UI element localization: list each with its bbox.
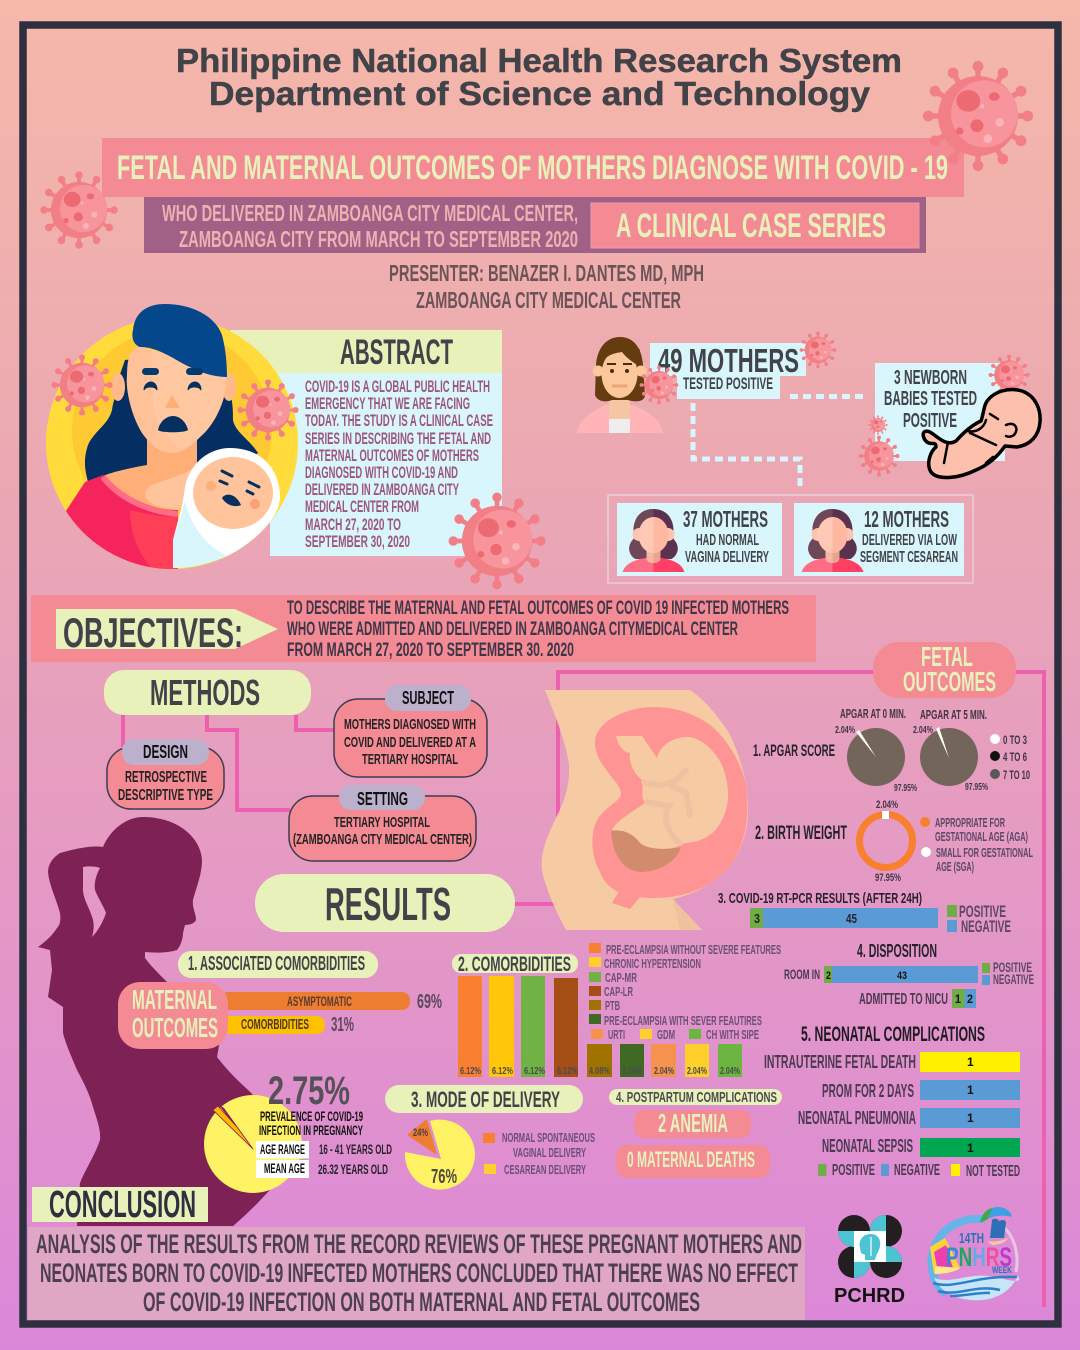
bar chart: comorbidities: 2.04%: [622, 1065, 642, 1077]
comorbidities legend: PRE-ECLAMPSIA WITH SEVER FEAUTIRES: [604, 1013, 762, 1028]
mode of delivery heading: [385, 1085, 583, 1113]
panel: disposition: [784, 941, 1034, 1008]
fetal outcomes heading: [873, 641, 1016, 698]
birth weight legend: [920, 815, 1033, 874]
logo: 14th PNHRS week: PNHRS: [946, 1242, 1012, 1272]
birth weight legend: AGE (SGA): [936, 859, 974, 874]
mean age: MEAN AGE: [264, 1160, 305, 1176]
card: setting: (ZAMBOANGA CITY MEDICAL CENTER): [293, 831, 472, 848]
bar chart: comorbidities: 6.12%: [460, 1065, 481, 1077]
rt-pcr bar: 45: [846, 911, 857, 926]
icon: virus at newborn bottom: [859, 436, 899, 476]
mode of delivery legend: NORMAL SPONTANEOUS: [502, 1130, 595, 1145]
pie: apgar 5 min: 2.04%: [913, 724, 933, 736]
prevalence pie: [204, 1095, 302, 1193]
newborn box: POSITIVE: [903, 410, 957, 432]
comorbidities legend: CH WITH SIPE: [706, 1027, 759, 1042]
nicu bar: 1: [955, 992, 961, 1006]
prevalence stats: INFECTION IN PREGNANCY: [259, 1122, 363, 1138]
presenter: ZAMBOANGA CITY MEDICAL CENTER: [416, 287, 681, 313]
fetal outcomes heading: OUTCOMES: [903, 666, 996, 697]
neonatal legend: [818, 1162, 1020, 1180]
clinical case series tag: A CLINICAL CASE SERIES: [616, 207, 886, 245]
panel: rt-pcr results: [718, 890, 1011, 936]
49 mothers box: TESTED POSITIVE: [683, 374, 773, 393]
objectives text: WHO WERE ADMITTED AND DELIVERED IN ZAMBOANGA CITYMEDICAL CENTER: [287, 619, 738, 640]
clinical case series tag: [591, 203, 919, 248]
panel: postpartum complications: 4. POSTPARTUM COMPLICATIONS: [616, 1089, 777, 1106]
conclusion heading: [32, 1184, 208, 1226]
prevalence stats: [256, 1069, 392, 1178]
objectives text: [287, 598, 789, 661]
abstract text: MATERNAL OUTCOMES OF MOTHERS: [305, 447, 479, 465]
room in bar: 2: [826, 970, 831, 982]
results heading: [255, 874, 515, 932]
objectives arrow tag: [56, 609, 278, 649]
abstract text: MARCH 27, 2020 TO: [305, 516, 401, 534]
icon: fetus: [923, 390, 1040, 478]
maternal deaths tag: [616, 1145, 770, 1178]
comorbidities legend: CAP-MR: [605, 970, 637, 985]
associated comorbidities bars: [220, 991, 442, 1036]
arrow: fetal outcomes bracket line: [515, 672, 1044, 1307]
icon: virus small: [868, 415, 888, 435]
subtitle banner: [144, 197, 926, 253]
asymptomatic bar: ASYMPTOMATIC: [287, 994, 352, 1009]
panel: neonatal complications: [764, 1023, 1020, 1180]
neonatal pneumonia: NEONATAL PNEUMONIA: [798, 1108, 916, 1128]
comorbidities legend: [589, 942, 781, 1042]
card: design: [107, 739, 224, 809]
comorbidities legend: URTI: [608, 1027, 625, 1042]
panel: patient flow: [577, 332, 1040, 583]
card: subject: SUBJECT: [402, 688, 454, 708]
bar chart: comorbidities: 2.04%: [720, 1065, 740, 1077]
illustration: pregnant uterus: [542, 690, 748, 930]
arrow: dashed connector to newborn: [790, 394, 864, 399]
card: 12 mothers: DELIVERED VIA LOW: [862, 532, 958, 549]
card: design: DESCRIPTIVE TYPE: [118, 787, 213, 804]
49 mothers box: [650, 342, 806, 399]
apgar legend: 0 TO 3: [1003, 733, 1027, 747]
card: setting: SETTING: [357, 789, 408, 809]
panel: birth weight: [755, 799, 1033, 884]
pie: apgar 0 min: 2.04%: [835, 724, 855, 736]
panel: postpartum complications: [609, 1089, 782, 1178]
card: 37 mothers: [617, 503, 782, 576]
maternal deaths tag: 0 MATERNAL DEATHS: [627, 1147, 755, 1172]
49 mothers box: 49 MOTHERS: [658, 342, 799, 379]
mode of delivery pie: [405, 1119, 475, 1190]
card: subject: COVID AND DELIVERED AT A: [344, 734, 476, 751]
title banner: [102, 138, 964, 197]
icon: virus at 49 mothers right: [800, 332, 836, 368]
maternal outcomes heading: MATERNAL: [132, 984, 217, 1015]
newborn box: [875, 363, 1005, 461]
card: setting: [289, 785, 476, 861]
bar chart: comorbidities: 2.04%: [654, 1065, 674, 1077]
abstract text: MEDICAL CENTER FROM: [305, 498, 419, 516]
disposition legend: [982, 959, 1034, 987]
results heading: RESULTS: [325, 878, 451, 930]
methods heading: [104, 670, 311, 715]
logo: PCHRD: [834, 1215, 905, 1307]
maternal outcomes heading: [118, 982, 228, 1049]
objectives text: FROM MARCH 27, 2020 TO SEPTEMBER 30. 2020: [287, 640, 574, 661]
panel: rt-pcr results: 3. COVID-19 RT-PCR RESULTS (AFTER 24H): [718, 890, 922, 907]
age range: AGE RANGE: [260, 1141, 305, 1157]
associated comorbidities heading: 1. ASSOCIATED COMORBIDITIES: [188, 953, 365, 975]
icon: virus at 49 mothers left: [640, 366, 678, 404]
donut chart: 2.04%: [876, 799, 898, 811]
logo: PCHRD: PCHRD: [834, 1285, 905, 1307]
disposition legend: NEGATIVE: [993, 971, 1034, 987]
card: 37 mothers: VAGINA DELIVERY: [685, 549, 769, 566]
birth weight legend: APPROPRIATE FOR: [935, 815, 1005, 830]
panel: apgar score: 1. APGAR SCORE: [753, 741, 835, 760]
card: subject: TERTIARY HOSPITAL: [362, 751, 458, 768]
icon: virus near mother left: [51, 354, 113, 416]
panel: apgar score: APGAR AT 0 MIN.: [840, 706, 906, 721]
card: 12 mothers: 12 MOTHERS: [864, 506, 949, 532]
methods connectors: [123, 715, 335, 810]
mode of delivery legend: VAGINAL DELIVERY: [513, 1145, 586, 1160]
comorbidities legend: CAP-LR: [604, 984, 633, 999]
bar chart: comorbidities: 4.08%: [589, 1065, 610, 1077]
apgar legend: 4 TO 6: [1003, 750, 1027, 764]
donut chart: [860, 799, 912, 884]
abstract text: TODAY. THE STUDY IS A CLINICAL CASE: [305, 412, 493, 430]
associated comorbidities heading: [178, 951, 378, 978]
anemia tag: 2 ANEMIA: [658, 1108, 728, 1138]
prevalence stats: 2.75%: [268, 1069, 350, 1113]
asymptomatic bar: [220, 991, 442, 1013]
age range: 16 - 41 YEARS OLD: [319, 1141, 392, 1157]
comorbidities heading: [452, 953, 578, 976]
abstract text: [305, 378, 493, 551]
icon: mother and baby illustration: [46, 304, 298, 575]
prom for 2 days: PROM FOR 2 DAYS: [822, 1081, 914, 1101]
mode of delivery pie: 24%: [413, 1127, 428, 1139]
panel: birth weight: 2. BIRTH WEIGHT: [755, 823, 847, 844]
age range: [256, 1141, 392, 1158]
methods heading: METHODS: [150, 672, 260, 713]
logo: 14th PNHRS week: WEEK: [992, 1265, 1012, 1275]
arrow: dashed connector to deliveries: [693, 403, 800, 490]
room in bar: [784, 966, 978, 983]
neonatal sepsis: 1: [967, 1141, 974, 1155]
subtitle banner: ZAMBOANGA CITY FROM MARCH TO SEPTEMBER 2020: [179, 226, 578, 252]
icon: virus at newborn top: [989, 355, 1029, 395]
nicu bar: ADMITTED TO NICU: [859, 991, 948, 1008]
rt-pcr bar: 3: [754, 911, 760, 926]
newborn box: 3 NEWBORN: [894, 367, 967, 389]
conclusion heading: CONCLUSION: [49, 1184, 196, 1226]
card: design: RETROSPECTIVE: [125, 769, 207, 786]
abstract text: DIAGNOSED WITH COVID-19 AND: [305, 464, 458, 482]
icon: virus top right: [923, 61, 1033, 171]
pie: apgar 5 min: [913, 724, 988, 793]
mode of delivery heading: 3. MODE OF DELIVERY: [411, 1087, 560, 1112]
maternal outcomes heading: OUTCOMES: [132, 1012, 218, 1043]
panel: objectives: [31, 595, 816, 662]
comorbidities legend: PTB: [605, 998, 620, 1013]
mode of delivery pie: 76%: [431, 1166, 457, 1188]
panel: disposition: 4. DISPOSITION: [857, 941, 937, 961]
header title: Department of Science and Technology: [209, 75, 871, 112]
panel: apgar score: APGAR AT 5 MIN.: [920, 707, 987, 722]
deliveries frame: [608, 495, 973, 583]
pie: apgar 5 min: 97.95%: [965, 781, 988, 793]
conclusion text: OF COVID-19 INFECTION ON BOTH MATERNAL AND FETAL OUTCOMES: [143, 1287, 700, 1317]
neonatal legend: NOT TESTED: [966, 1163, 1020, 1180]
fetal outcomes heading: FETAL: [921, 641, 973, 672]
card: 12 mothers: [794, 503, 964, 576]
card: subject: [334, 685, 487, 777]
bar chart: comorbidities: 2.04%: [687, 1065, 707, 1077]
neonatal pneumonia: 1: [967, 1111, 974, 1125]
bar chart: comorbidities: 6.12%: [557, 1065, 578, 1077]
card: design: DESIGN: [143, 742, 188, 762]
card: 37 mothers: 37 MOTHERS: [683, 506, 768, 532]
neonatal legend: NEGATIVE: [894, 1162, 940, 1179]
comorbidities legend: GDM: [657, 1027, 675, 1042]
panel: objectives: OBJECTIVES:: [63, 609, 243, 656]
rt-pcr bar: [750, 908, 938, 928]
newborn box: BABIES TESTED: [884, 388, 977, 410]
logo: 14th PNHRS week: [930, 1207, 1019, 1300]
abstract text: EMERGENCY THAT WE ARE FACING: [305, 395, 470, 413]
icon: virus near mother right: [237, 379, 299, 441]
rt-pcr legend: NEGATIVE: [961, 917, 1011, 936]
neonatal sepsis: NEONATAL SEPSIS: [822, 1136, 913, 1156]
abstract text: SERIES IN DESCRIBING THE FETAL AND: [305, 430, 491, 448]
prom for 2 days: 1: [967, 1083, 974, 1097]
intrauterine fetal death: 1: [967, 1055, 974, 1069]
presenter: [389, 260, 704, 313]
panel: abstract: [230, 330, 502, 556]
comorbidities legend: CHRONIC HYPERTENSION: [604, 956, 701, 971]
abstract heading: ABSTRACT: [340, 333, 453, 372]
mean age: [256, 1160, 388, 1178]
conclusion text: [28, 1227, 805, 1320]
bar chart: comorbidities: 6.12%: [492, 1065, 513, 1077]
header title: Philippine National Health Research System: [176, 42, 902, 79]
card: 12 mothers: SEGMENT CESAREAN: [860, 549, 958, 566]
panel: apgar score: [753, 706, 1030, 794]
silhouette: pregnant woman: [38, 817, 287, 1226]
mean age: 26.32 YEARS OLD: [318, 1161, 388, 1177]
mode of delivery legend: CESAREAN DELIVERY: [504, 1162, 586, 1177]
logo: 14th PNHRS week: 14TH: [959, 1230, 984, 1247]
icon: virus bottom of abstract: [449, 493, 545, 589]
apgar legend: [990, 733, 1030, 782]
comorbidities heading: 2. COMORBIDITIES: [458, 953, 571, 976]
rt-pcr legend: [947, 902, 1011, 936]
room in bar: 43: [897, 970, 907, 982]
presenter: PRESENTER: BENAZER I. DANTES MD, MPH: [389, 260, 704, 286]
asymptomatic bar: 69%: [417, 991, 442, 1013]
icon: mother: [577, 337, 663, 433]
pie: apgar 0 min: 97.95%: [894, 782, 917, 794]
comorbidities bar: COMORBIDITIES: [241, 1017, 309, 1033]
bar chart: comorbidities: 6.12%: [524, 1065, 545, 1077]
card: subject: MOTHERS DIAGNOSED WITH: [344, 716, 476, 733]
room in bar: ROOM IN: [784, 966, 820, 982]
intrauterine fetal death: INTRAUTERINE FETAL DEATH: [764, 1052, 916, 1072]
icon: virus left of title: [40, 171, 118, 249]
subtitle banner: WHO DELIVERED IN ZAMBOANGA CITY MEDICAL CENTER,: [162, 200, 578, 226]
neonatal legend: POSITIVE: [832, 1162, 875, 1179]
comorbidities bar: [220, 1014, 354, 1036]
abstract text: SEPTEMBER 30, 2020: [305, 533, 410, 551]
rt-pcr legend: POSITIVE: [959, 902, 1006, 921]
anemia tag: [634, 1108, 751, 1138]
pie: apgar 0 min: [835, 724, 917, 794]
abstract text: COVID-19 IS A GLOBAL PUBLIC HEALTH: [305, 378, 490, 396]
mode of delivery legend: [483, 1130, 595, 1177]
comorbidities bar: 31%: [331, 1014, 354, 1036]
apgar legend: 7 TO 10: [1003, 768, 1030, 782]
disposition legend: POSITIVE: [993, 959, 1032, 975]
header title: [176, 42, 902, 112]
donut chart: 97.95%: [875, 872, 901, 884]
bar chart: comorbidities: [458, 976, 742, 1077]
card: setting: TERTIARY HOSPITAL: [334, 814, 430, 831]
abstract text: DELIVERED IN ZAMBOANGA CITY: [305, 481, 459, 499]
card: 37 mothers: HAD NORMAL: [696, 532, 759, 549]
nicu bar: 2: [967, 992, 973, 1006]
prevalence stats: PREVALENCE OF COVID-19: [260, 1108, 363, 1124]
comorbidities legend: PRE-ECLAMPSIA WITHOUT SEVERE FEATURES: [606, 942, 781, 957]
